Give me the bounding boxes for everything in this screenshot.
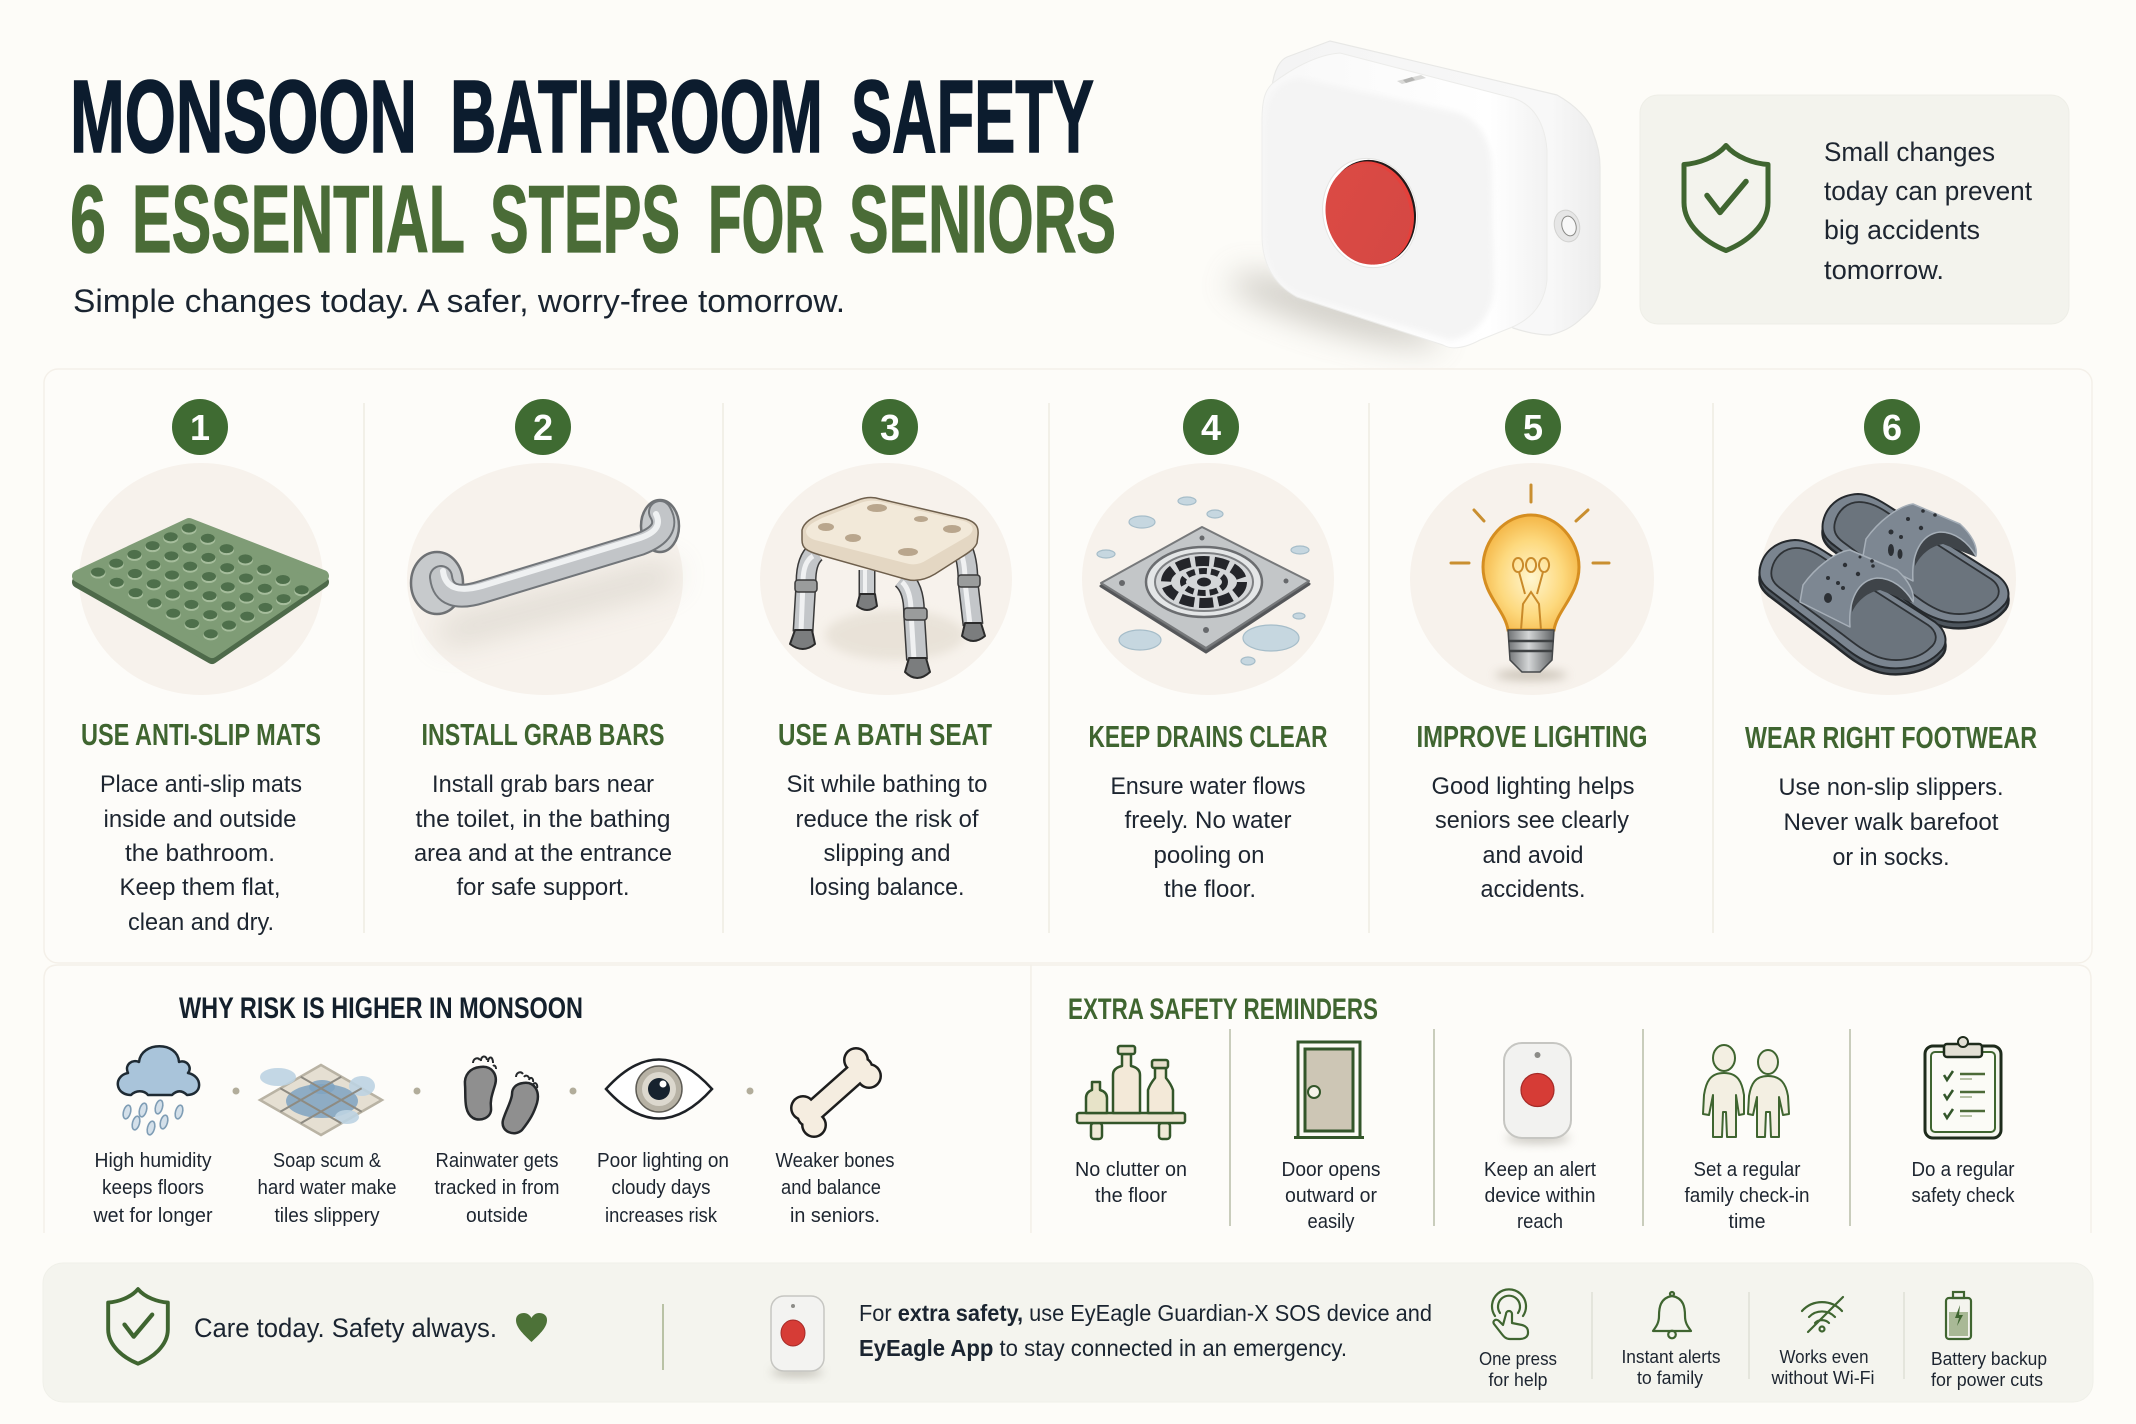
step 3: bath seat: USE A BATH SEAT (778, 717, 992, 752)
captions: why risk: Soap scum & (273, 1150, 382, 1172)
title: MONSOON (70, 59, 417, 174)
step 4 text: freely. No water (1124, 807, 1292, 834)
title: FOR (708, 166, 824, 273)
step 6: footwear: 6 (1882, 407, 1902, 448)
captions: reminders: Set a regular (1694, 1159, 1801, 1181)
step 1 text: Place anti-slip mats (100, 771, 302, 798)
icon: heart (516, 1313, 547, 1342)
icon: eye (606, 1060, 712, 1118)
step 3 text (786, 771, 988, 901)
captions: why risk: wet for longer (93, 1205, 213, 1227)
step 5: lighting: 5 (1523, 407, 1543, 448)
step 4 text: the floor. (1164, 876, 1256, 903)
icon: shield check (1684, 146, 1768, 250)
panel: footer banner (43, 1263, 2093, 1402)
captions: why risk: and balance (781, 1177, 881, 1199)
step 4: drains: 4 (1201, 407, 1221, 448)
step 5: lighting: IMPROVE LIGHTING (1416, 719, 1648, 754)
callout text: tomorrow. (1824, 255, 1944, 285)
step 3 text: reduce the risk of (796, 806, 979, 833)
icon: slippery tiles (260, 1065, 382, 1135)
feature: works without wifi (1771, 1297, 1874, 1388)
callout text: big accidents (1824, 215, 1980, 245)
icon: bone (790, 1047, 882, 1138)
icon: family (1703, 1045, 1789, 1137)
step 6 text: or in socks. (1832, 844, 1950, 871)
captions: why risk: cloudy days (612, 1177, 710, 1199)
captions: reminders (1075, 1159, 2015, 1233)
step 5 text: Good lighting helps (1432, 773, 1634, 800)
step 4 text (1110, 773, 1306, 903)
step 6: footwear: WEAR RIGHT FOOTWEAR (1745, 720, 2037, 755)
step 2: grab bars (407, 399, 683, 901)
captions: reminders: time (1728, 1211, 1766, 1233)
icon: wet footprints (465, 1056, 538, 1133)
captions: reminders: safety check (1912, 1185, 2015, 1207)
feature: one press: One press (1479, 1348, 1557, 1369)
title: 6 (70, 166, 106, 273)
step 1 text (100, 771, 302, 936)
step 2 text: the toilet, in the bathing (416, 806, 670, 833)
captions: reminders: Keep an alert (1484, 1159, 1596, 1181)
captions: why risk: outside (466, 1205, 528, 1227)
step 1 text: clean and dry. (128, 909, 274, 936)
title: STEPS (490, 166, 680, 273)
icon: clipboard (1925, 1037, 2001, 1138)
feature: one press: for help (1488, 1369, 1548, 1390)
icon: footer shield (108, 1289, 168, 1364)
step 4: drains (1082, 399, 1334, 903)
step 2: grab bars: INSTALL GRAB BARS (422, 717, 664, 752)
step 5: lighting (1410, 399, 1654, 903)
tagline: Care today. Safety always. (194, 1313, 497, 1343)
captions: reminders: No clutter on (1075, 1159, 1187, 1181)
captions: why risk (93, 1150, 894, 1227)
captions: why risk: hard water make (258, 1177, 396, 1199)
step 6 text (1778, 774, 2004, 871)
icon: alert device (1504, 1043, 1571, 1143)
title: SAFETY (851, 59, 1094, 174)
icon: stool (790, 498, 985, 678)
captions: why risk: keeps floors (102, 1177, 204, 1199)
step 4: drains: KEEP DRAINS CLEAR (1088, 719, 1328, 754)
captions: why risk: Poor lighting on (597, 1150, 729, 1172)
promo text: For extra safety, use EyEagle Guardian-X SOS device and (859, 1300, 1432, 1326)
panel: why risk is higher (44, 965, 1031, 1233)
feature: battery backup: for power cuts (1931, 1369, 2043, 1390)
front slipper (1760, 540, 1945, 674)
step 5 text (1432, 773, 1634, 903)
subtitle: Simple changes today. A safer, worry-free tomorrow. (73, 283, 845, 319)
step 1: anti-slip mats: 1 (190, 407, 210, 448)
promo text: EyEagle App to stay connected in an emergency. (859, 1335, 1347, 1361)
promo text (859, 1300, 1432, 1361)
captions: why risk: tracked in from (434, 1177, 560, 1199)
callout text: Small changes (1824, 137, 1995, 167)
icon: grab bar (411, 500, 679, 632)
feature: one press (1479, 1289, 1557, 1390)
step 3 text: Sit while bathing to (786, 771, 988, 798)
step 2: grab bars: 2 (533, 407, 553, 448)
captions: reminders: the floor (1095, 1185, 1167, 1207)
captions: reminders: Door opens (1282, 1159, 1380, 1181)
icon: water drops (1097, 497, 1309, 665)
icon: light bulb (1451, 485, 1609, 680)
panel: extra safety reminders (1031, 965, 2091, 1233)
captions: reminders: outward or (1285, 1185, 1377, 1207)
step 1: anti-slip mats (78, 399, 323, 936)
feature: battery backup (1931, 1292, 2047, 1390)
hero SOS device (1224, 41, 1600, 360)
step 1 text: Keep them flat, (120, 874, 280, 901)
captions: reminders: device within (1484, 1185, 1596, 1207)
icon: mat (78, 524, 323, 658)
captions: why risk: tiles slippery (274, 1205, 380, 1227)
captions: why risk: in seniors. (790, 1205, 880, 1227)
step 1 text: inside and outside (104, 806, 296, 833)
step 5 text: seniors see clearly (1435, 807, 1629, 834)
panel: six steps (44, 369, 2092, 963)
captions: why risk: Rainwater gets (436, 1150, 558, 1172)
feature: works without wifi: without Wi-Fi (1771, 1367, 1874, 1388)
step 3 text: slipping and (824, 840, 950, 867)
step 5 text: accidents. (1480, 876, 1586, 903)
icon: shelf with bottles (1077, 1046, 1185, 1139)
step 2 text: Install grab bars near (432, 771, 654, 798)
captions: why risk: increases risk (605, 1205, 718, 1227)
callout text: today can prevent (1824, 176, 2032, 206)
step 1 text: the bathroom. (125, 840, 275, 867)
feature: instant alerts: to family (1637, 1367, 1704, 1388)
icon: floor drain (1101, 527, 1309, 652)
captions: reminders: reach (1517, 1211, 1563, 1233)
step 5 text: and avoid (1482, 842, 1584, 869)
separator dots (232, 1088, 754, 1094)
step 1: anti-slip mats: USE ANTI-SLIP MATS (81, 717, 321, 752)
captions: reminders: easily (1308, 1211, 1354, 1233)
title: ESSENTIAL (132, 166, 465, 273)
feature: instant alerts: Instant alerts (1622, 1346, 1720, 1367)
icon: door (1294, 1042, 1364, 1138)
heading: why risk: WHY RISK IS HIGHER IN MONSOON (179, 992, 583, 1025)
step 4 text: pooling on (1154, 842, 1264, 869)
feature: works without wifi: Works even (1780, 1346, 1868, 1367)
title (70, 59, 1116, 273)
heading: extra safety: EXTRA SAFETY REMINDERS (1068, 993, 1378, 1026)
back slipper (1822, 494, 2008, 628)
step 6 text: Use non-slip slippers. (1778, 774, 2004, 801)
step 2 text: for safe support. (456, 874, 630, 901)
step 3: bath seat: 3 (880, 407, 900, 448)
feature: battery backup: Battery backup (1931, 1348, 2047, 1369)
callout text (1824, 137, 2032, 285)
captions: reminders: family check-in (1684, 1185, 1810, 1207)
feature: instant alerts (1622, 1292, 1720, 1388)
step 6: footwear (1745, 399, 2037, 871)
icon: slippers (1760, 494, 2008, 674)
step 6 text: Never walk barefoot (1784, 809, 1999, 836)
icon: rain cloud (118, 1046, 199, 1136)
step 2 text: area and at the entrance (414, 840, 672, 867)
captions: why risk: High humidity (94, 1150, 212, 1172)
step 3: bath seat (760, 399, 1012, 901)
title: SENIORS (849, 166, 1116, 273)
title: BATHROOM (450, 59, 823, 174)
step 3 text: losing balance. (810, 874, 964, 901)
icon: small SOS device (771, 1296, 824, 1376)
step 2 text (414, 771, 672, 901)
callout: small changes (1640, 95, 2069, 324)
step 4 text: Ensure water flows (1110, 773, 1306, 800)
captions: why risk: Weaker bones (776, 1150, 894, 1172)
captions: reminders: Do a regular (1912, 1159, 2015, 1181)
